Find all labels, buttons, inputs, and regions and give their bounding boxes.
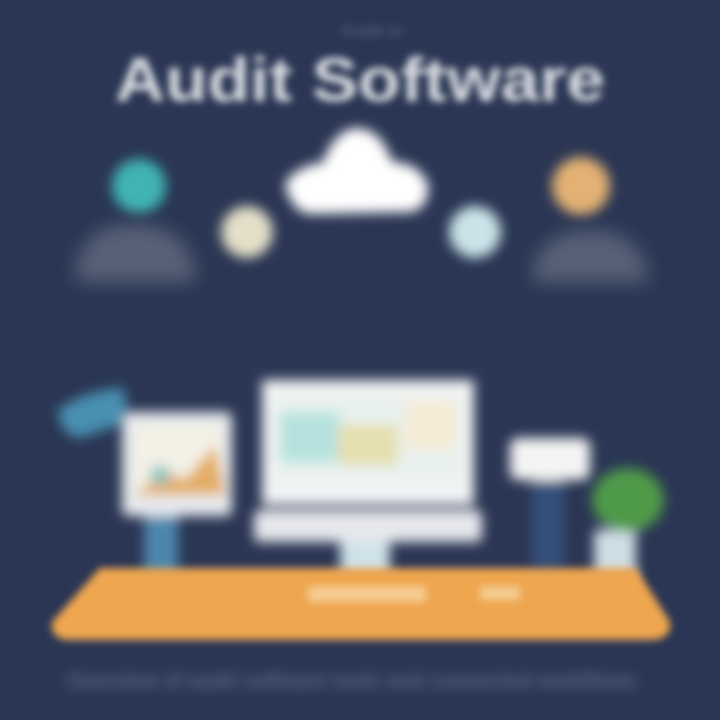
server device	[510, 438, 590, 570]
title	[115, 23, 605, 115]
icon: plant	[592, 468, 664, 580]
title: Guide to	[342, 23, 402, 40]
tablet on stand	[122, 412, 232, 580]
person: right head	[552, 157, 610, 215]
person: right	[532, 157, 648, 282]
person: left	[76, 159, 196, 282]
monitor	[254, 380, 482, 580]
person: left body	[76, 224, 196, 282]
person: left head	[112, 159, 166, 213]
desk labels	[308, 586, 520, 602]
node: right	[449, 206, 501, 258]
icon: cloud	[286, 128, 428, 214]
title: Audit Software	[115, 46, 605, 115]
person: right body	[532, 230, 648, 282]
desk	[52, 568, 670, 640]
caption: Overview of audit software tools and connected workflows	[67, 668, 637, 693]
icon: speech bubble	[58, 388, 128, 438]
node: left	[221, 206, 273, 258]
